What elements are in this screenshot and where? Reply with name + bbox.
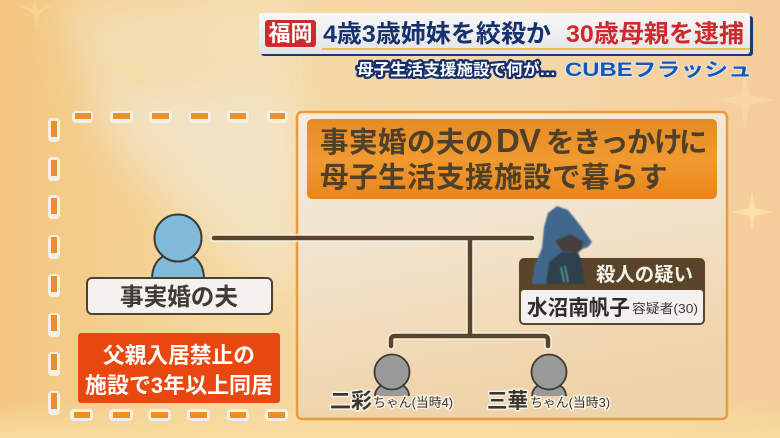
heading banner — [307, 119, 717, 199]
title bar: 福岡 — [268, 21, 312, 46]
icon: child 1 — [374, 354, 410, 396]
panel: dashed frame — [48, 111, 288, 421]
logo: CUBE flash: CUBEフラッシュ — [565, 60, 752, 81]
title bar: 4歳3歳姉妹を絞殺か — [323, 20, 551, 48]
panel: main family panel — [297, 112, 727, 419]
title bar: 30歳母親を逮捕 — [566, 20, 744, 48]
family connector lines — [214, 238, 548, 346]
label: suspect: 殺人の疑い — [596, 264, 693, 286]
subtitle: 母子生活支援施設で何が… — [357, 60, 556, 79]
label: child 1: ちゃん(当時4) — [373, 395, 453, 410]
callout: father not allowed: 父親入居禁止の — [103, 343, 255, 368]
callout: father not allowed — [78, 333, 280, 403]
label: husband: 事実婚の夫 — [120, 284, 238, 311]
label: child 2 — [487, 390, 610, 413]
heading banner: をきっかけに — [546, 127, 708, 159]
heading banner: DV — [496, 122, 541, 159]
photo: hooded suspect — [532, 206, 592, 284]
label: suspect: 水沼南帆子 — [527, 297, 630, 320]
label: husband — [87, 278, 272, 314]
callout: father not allowed: 施設で3年以上同居 — [85, 373, 273, 398]
title bar — [259, 13, 753, 56]
icon: husband figure — [152, 214, 204, 279]
heading banner: 事実婚の夫の — [320, 127, 494, 159]
label: child 1 — [330, 390, 453, 413]
label: child 1: 二彩 — [330, 390, 372, 413]
heading banner: 母子生活支援施設で暮らす — [320, 162, 668, 194]
label: child 2: 三華 — [487, 390, 528, 413]
label: suspect — [519, 258, 705, 325]
label: child 2: ちゃん(当時3) — [530, 395, 610, 410]
icon: child 2 — [532, 354, 566, 396]
label: suspect: 容疑者(30) — [632, 301, 698, 316]
